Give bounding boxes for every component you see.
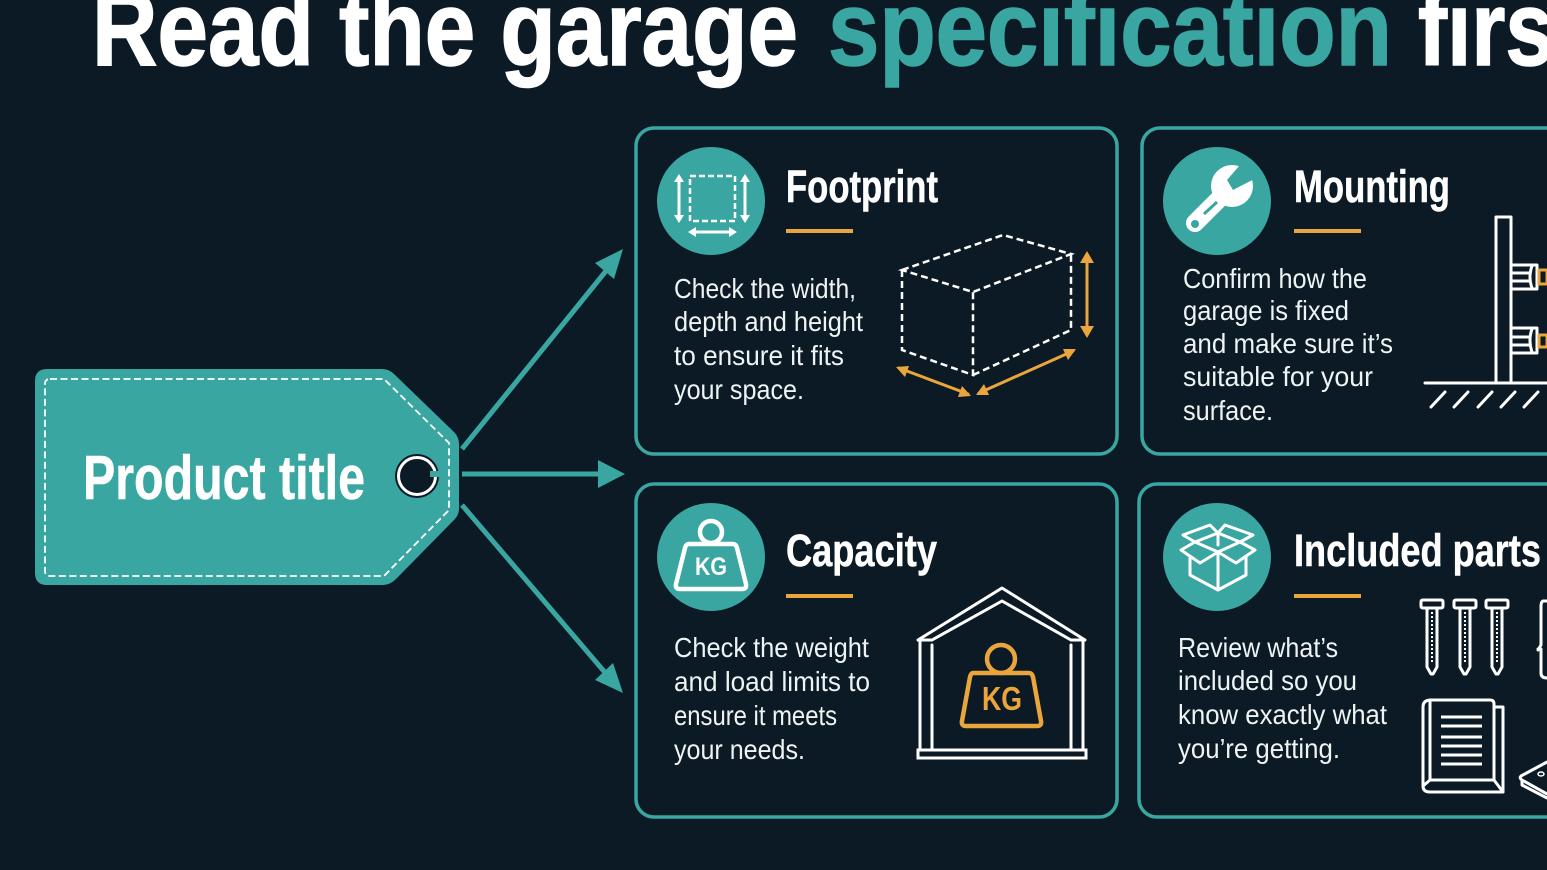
- text: mounting: surface.: [1183, 395, 1273, 426]
- text: footprint: depth and height: [674, 306, 863, 337]
- text: included parts: Review what’s: [1178, 632, 1338, 663]
- illustration: garage with weight: [918, 588, 1086, 758]
- heading: footprint: Footprint: [786, 161, 938, 212]
- illustration: wall mounting: [1425, 217, 1547, 407]
- panel: footprint: [636, 128, 1117, 454]
- text: capacity: [674, 632, 870, 765]
- illustration: screws: [1421, 600, 1547, 678]
- text: capacity: your needs.: [674, 734, 805, 765]
- text: footprint: Check the width,: [674, 273, 856, 304]
- arrow: to capacity: [462, 505, 623, 693]
- text: footprint: [674, 273, 863, 405]
- underline: [1294, 594, 1361, 598]
- panel: capacity: [636, 484, 1117, 817]
- heading: capacity: Capacity: [786, 525, 937, 576]
- text: included parts: [1178, 632, 1387, 764]
- text: included parts: included so you: [1178, 665, 1357, 696]
- arrow: to panels centre: [462, 460, 625, 488]
- icon: footprint: [657, 147, 765, 255]
- heading: mounting: Mounting: [1294, 161, 1450, 212]
- text: included parts: you’re getting.: [1178, 733, 1340, 764]
- tag hole: [395, 454, 446, 498]
- icon: wrench: [1163, 147, 1271, 255]
- text: included parts: know exactly what: [1178, 699, 1387, 730]
- underline: [786, 229, 853, 233]
- panel: mounting: [1142, 128, 1547, 454]
- product tag: [35, 369, 459, 585]
- text: mounting: garage is fixed: [1183, 295, 1349, 326]
- icon: box: [1163, 503, 1271, 611]
- underline: [1294, 229, 1361, 233]
- arrow: to footprint: [462, 249, 623, 449]
- text: mounting: Confirm how the: [1183, 263, 1367, 294]
- text: mounting: [1183, 263, 1393, 426]
- text: mounting: and make sure it’s: [1183, 328, 1393, 359]
- text: mounting: suitable for your: [1183, 361, 1373, 392]
- tag label: Product title: [83, 444, 365, 513]
- text: capacity: and load limits to: [674, 666, 870, 697]
- text: footprint: your space.: [674, 374, 804, 405]
- illustration: garage with weight: KG: [982, 680, 1022, 717]
- icon: weight: KG: [695, 553, 727, 581]
- icon: weight: [657, 503, 765, 611]
- underline: [786, 594, 853, 598]
- title: [92, 0, 1547, 88]
- text: capacity: ensure it meets: [674, 700, 837, 731]
- panel: included parts: [1139, 484, 1547, 817]
- illustration: mounting plate: [1520, 762, 1547, 798]
- illustration: manual: [1423, 700, 1503, 792]
- text: footprint: to ensure it fits: [674, 340, 844, 371]
- illustration: dashed box with dimensions: [896, 235, 1094, 397]
- text: capacity: Check the weight: [674, 632, 869, 663]
